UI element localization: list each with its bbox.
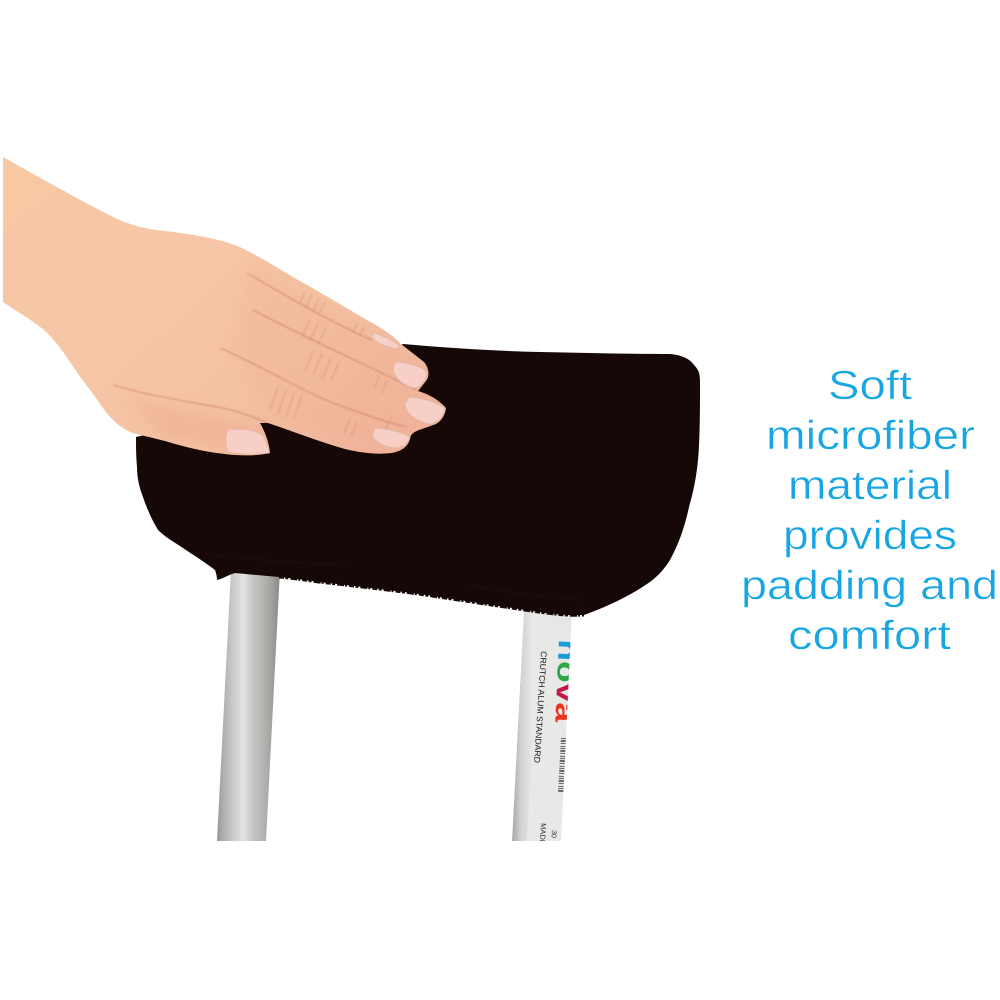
elastic gathers at hem	[190, 552, 585, 600]
barcode	[561, 738, 564, 792]
line 5: padding and	[741, 562, 998, 608]
finger tone	[399, 376, 440, 451]
frayed hem	[279, 577, 584, 615]
tube body	[512, 610, 572, 841]
line 4: provides	[783, 512, 957, 558]
crutch pad cover	[136, 344, 700, 615]
microfiber cushion	[136, 344, 700, 615]
product name: CRUTCH ALUM STANDARD	[532, 651, 549, 763]
finger separation creases	[113, 273, 417, 427]
line 6: comfort	[788, 612, 952, 658]
small print number: 30	[550, 830, 557, 838]
right crutch tube with label	[512, 611, 572, 841]
hand shading	[113, 262, 446, 455]
fingernails	[226, 333, 445, 454]
brand logo: n o v a	[549, 639, 583, 724]
middle nail	[405, 397, 445, 424]
line 2: microfiber	[766, 412, 975, 458]
product sticker	[527, 626, 572, 841]
line 3: material	[788, 462, 952, 508]
thumb nail	[226, 429, 269, 454]
knuckle wrinkles	[270, 292, 392, 436]
ring nail	[393, 362, 427, 388]
left crutch tube	[217, 570, 280, 841]
index nail	[372, 428, 410, 448]
infographic canvas	[3, 157, 995, 841]
pinky nail	[372, 333, 400, 349]
hand resting on pad	[3, 157, 446, 455]
caption: soft microfiber material	[741, 362, 998, 658]
pink tone on thumb	[144, 406, 268, 443]
line 1: Soft	[828, 362, 913, 408]
hand silhouette	[3, 157, 446, 455]
small print: MADE	[538, 823, 548, 845]
